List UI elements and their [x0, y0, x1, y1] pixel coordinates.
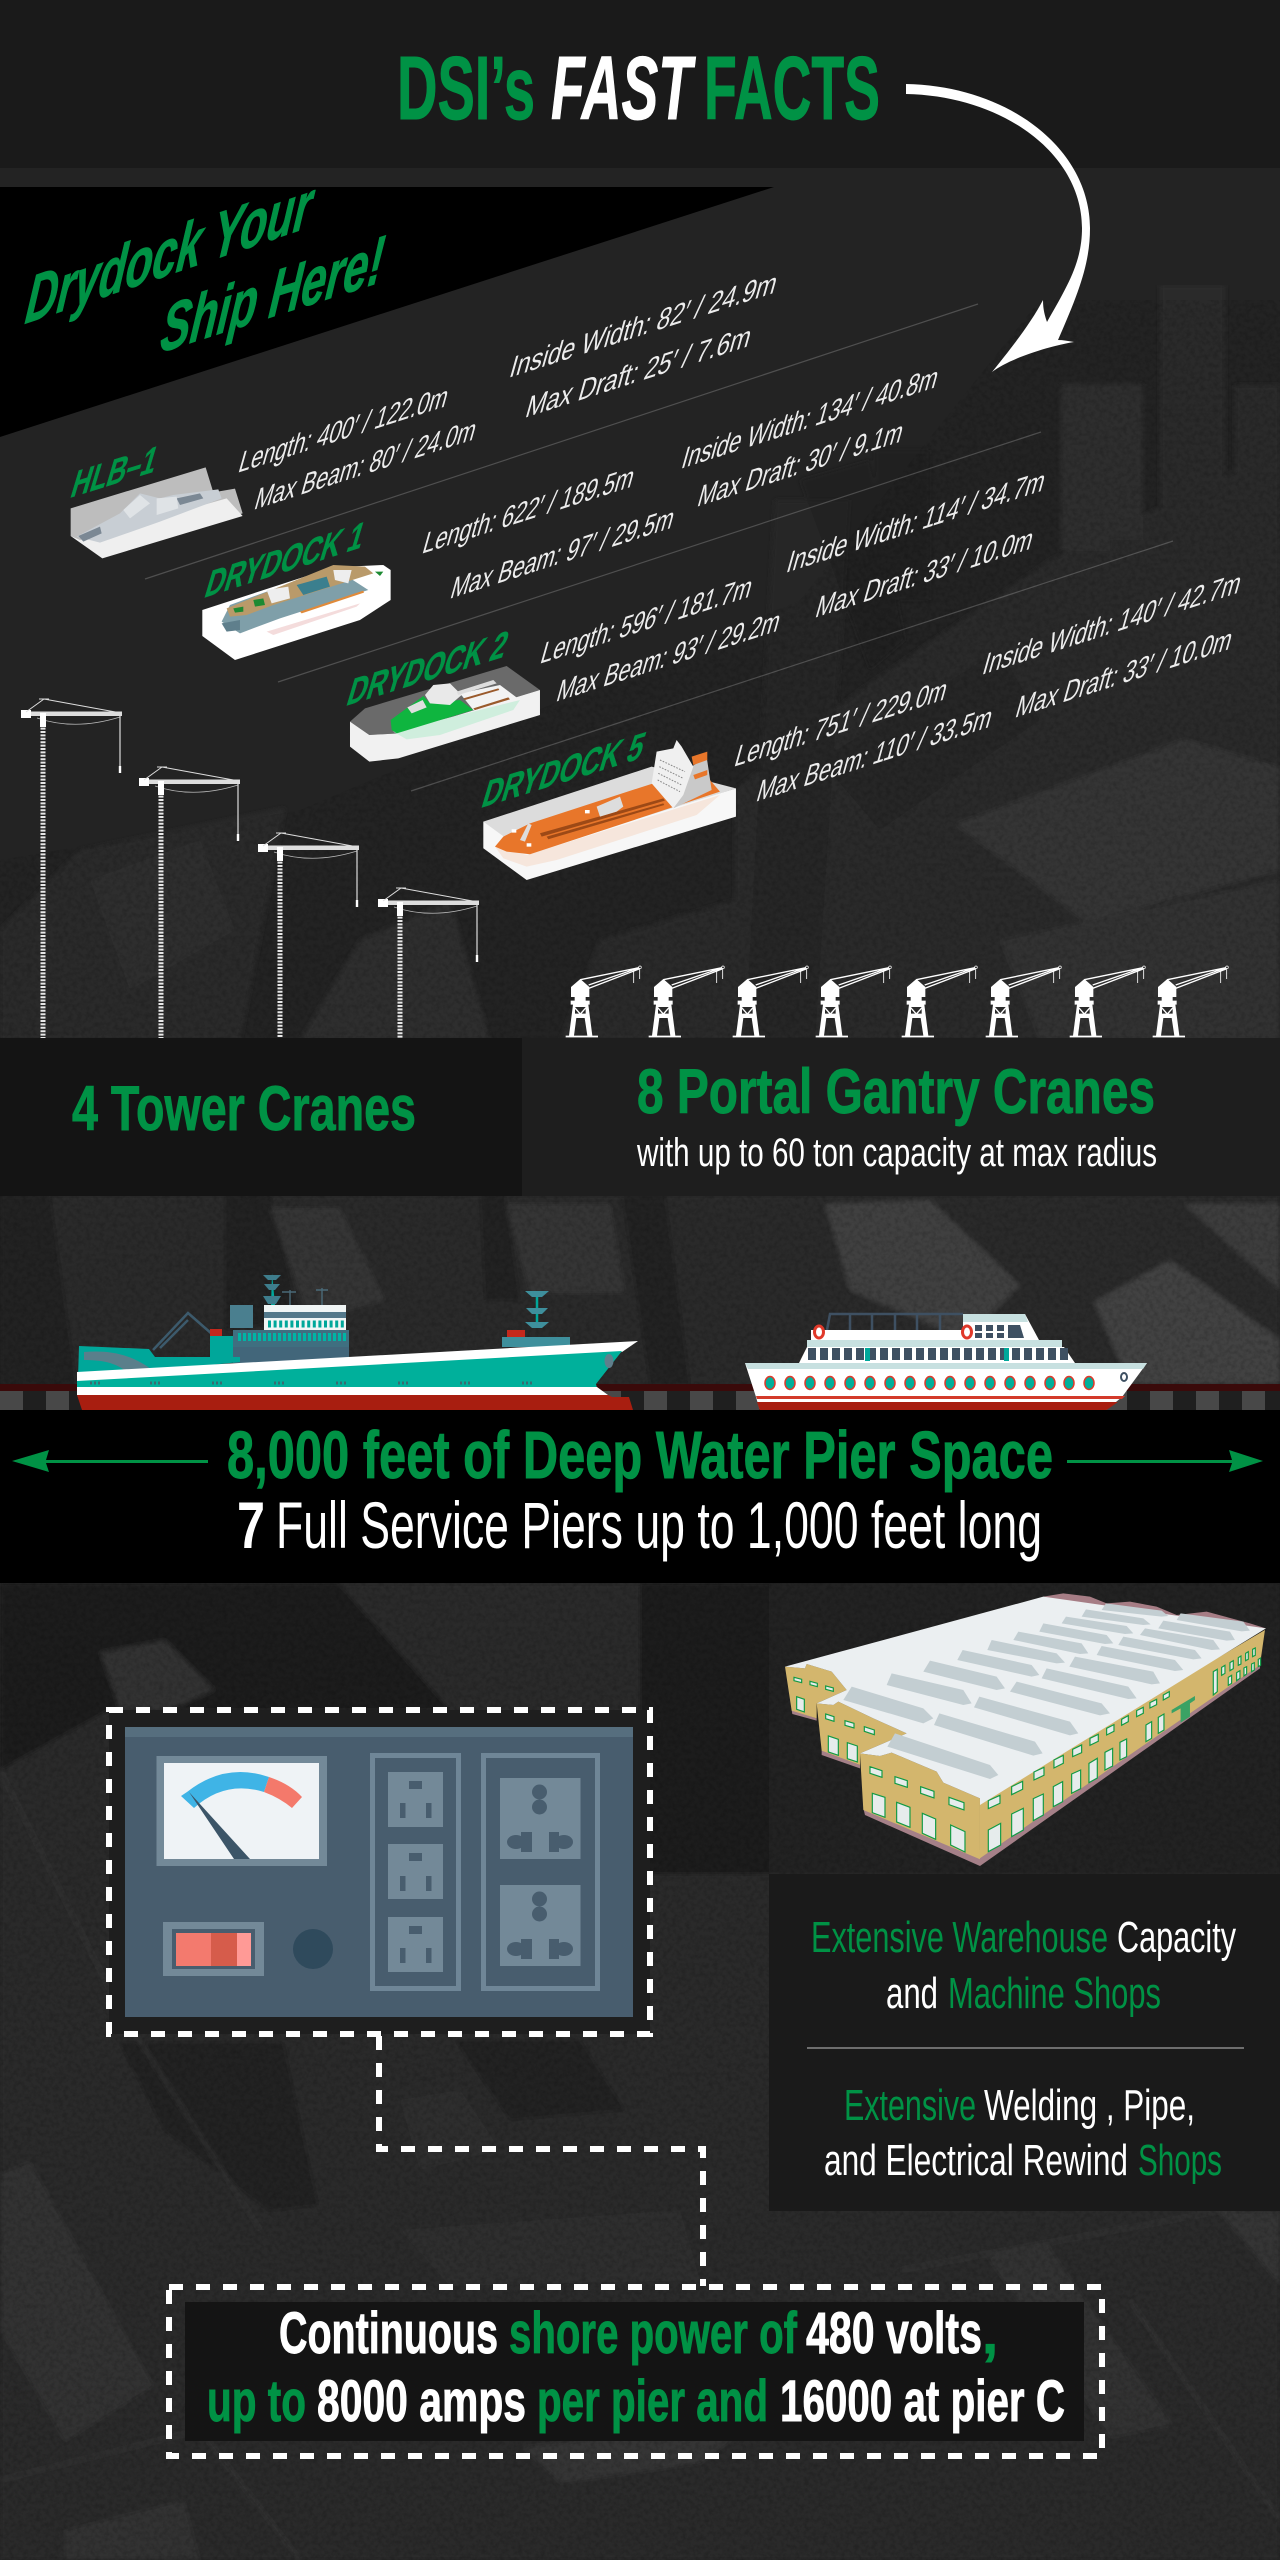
specs: HLB-1: Max Draft: 25′ / 7.6m — [522, 319, 756, 425]
text: shore power line two: up to — [207, 2369, 306, 2434]
panel backdrop — [109, 1710, 650, 2034]
icons: 8 portal gantry cranes — [566, 966, 1228, 1037]
icon: orange tanker in dock — [483, 740, 736, 880]
title: DSI’s — [397, 39, 535, 139]
specs: Drydock 5: Length: 751′ / 229.0m — [731, 672, 952, 774]
specs: Drydock 1: Inside Width: 134′ / 40.8m — [678, 360, 943, 476]
arrow: left — [12, 1450, 208, 1472]
text: shore power line one — [279, 2301, 998, 2366]
text: warehouse capacity — [811, 1913, 1236, 2018]
text: shore power line one: , — [982, 2301, 998, 2366]
specs: Drydock 5: Max Beam: 110′ / 33.5m — [753, 699, 997, 809]
panel: tower cranes label: 4 Tower Cranes — [72, 1074, 416, 1144]
title — [397, 39, 880, 139]
icon: electrical panel — [109, 1710, 650, 2034]
drydock: Drydock 2 — [342, 463, 1050, 762]
arrow: right — [1067, 1450, 1263, 1472]
text: welding and rewind shops: Welding , Pipe, — [984, 2081, 1195, 2130]
drydock: HLB-1: HLB–1 — [66, 437, 164, 507]
arrow: curved from title to drydocks — [906, 84, 1090, 372]
specs: Drydock 1: Length: 622′ / 189.5m — [419, 459, 639, 561]
panel: shore power — [185, 2301, 1084, 2441]
drydock: Drydock 5: DRYDOCK 5 — [477, 723, 651, 817]
drydock: Drydock 1 — [200, 360, 943, 660]
drydock: HLB-1 — [66, 265, 782, 558]
specs: Drydock 2: Length: 596′ / 181.7m — [537, 569, 757, 671]
text: welding and rewind shops: Extensive — [844, 2081, 976, 2130]
text: shore power line two — [207, 2369, 1065, 2434]
specs: Drydock 1: Max Beam: 97′ / 29.5m — [447, 500, 679, 606]
gauge — [156, 1756, 327, 1866]
text: service piers: 7 — [237, 1488, 265, 1562]
icon: cruise ship in dock — [202, 565, 391, 660]
icon: white passenger ferry — [745, 1314, 1147, 1411]
title: FAST — [551, 39, 696, 139]
specs: Drydock 1: Max Draft: 30′ / 9.1m — [694, 414, 908, 514]
text: shore power line two: 8000 amps — [317, 2369, 526, 2434]
outlets: three-pin column — [372, 1756, 458, 1988]
separator lines — [145, 304, 1173, 791]
drydock: Drydock 2: DRYDOCK 2 — [342, 622, 514, 715]
text: warehouse capacity: and — [886, 1969, 938, 2018]
specs: Drydock 2: Max Draft: 33′ / 10.0m — [812, 521, 1038, 625]
text: welding and rewind shops: and Electrical Rewind — [824, 2136, 1128, 2185]
panel: gantry cranes label — [522, 1038, 1280, 1196]
outlets: universal column — [484, 1756, 598, 1988]
icon: HLB-1 ship in dock — [71, 467, 243, 558]
text: shore power line one: Continuous — [279, 2301, 498, 2366]
specs: HLB-1: Length: 400′ / 122.0m — [235, 379, 453, 480]
specs: Drydock 1 — [419, 360, 943, 606]
indicator knob — [293, 1929, 333, 1969]
dashed frames and connector — [109, 1710, 1102, 2456]
specs: Drydock 2 — [537, 463, 1050, 709]
rocker switch — [163, 1922, 264, 1976]
text: shore power line two: 16000 at pier C — [780, 2369, 1065, 2434]
specs: Drydock 5 — [731, 565, 1246, 809]
panel: header band — [0, 0, 1280, 168]
icon: green supply ship in dock — [350, 666, 540, 762]
callout: Drydock Your Ship Here: Drydock Your — [22, 164, 319, 339]
drydock: Drydock 5 — [477, 565, 1246, 880]
text: welding and rewind shops: Shops — [1138, 2136, 1222, 2185]
specs: Drydock 2: Inside Width: 114′ / 34.7m — [783, 463, 1050, 580]
callout: Drydock Your Ship Here — [22, 164, 388, 368]
specs: HLB-1: Inside Width: 82′ / 24.9m — [506, 265, 782, 385]
title: FACTS — [704, 39, 880, 139]
text: shore power line one: shore power of — [509, 2301, 797, 2366]
panel: tower cranes label — [0, 1038, 522, 1196]
panel: warehouse and shops — [769, 1874, 1280, 2211]
panel: pier space band — [0, 1410, 1280, 1583]
specs: HLB-1 — [235, 265, 782, 517]
text: warehouse capacity: Extensive Warehouse — [811, 1913, 1108, 1962]
callout: Drydock Your Ship Here: Ship Here! — [157, 221, 388, 368]
icon: teal cargo ship — [77, 1273, 638, 1410]
waterline stripes — [0, 1384, 1280, 1410]
text: welding and rewind shops — [824, 2081, 1222, 2185]
icons: 4 tower cranes — [21, 699, 479, 1038]
specs: Drydock 2: Max Beam: 93′ / 29.2m — [553, 603, 785, 709]
panel: black corner banner — [0, 187, 774, 437]
text: shore power line one: 480 volts — [806, 2301, 982, 2366]
icon: warehouse building — [785, 1593, 1266, 1866]
specs: HLB-1: Max Beam: 80′ / 24.0m — [251, 412, 481, 517]
text: shore power line two: per pier and — [537, 2369, 768, 2434]
drydock: Drydock 1: DRYDOCK 1 — [200, 512, 371, 607]
text: warehouse capacity: Machine Shops — [948, 1969, 1161, 2018]
